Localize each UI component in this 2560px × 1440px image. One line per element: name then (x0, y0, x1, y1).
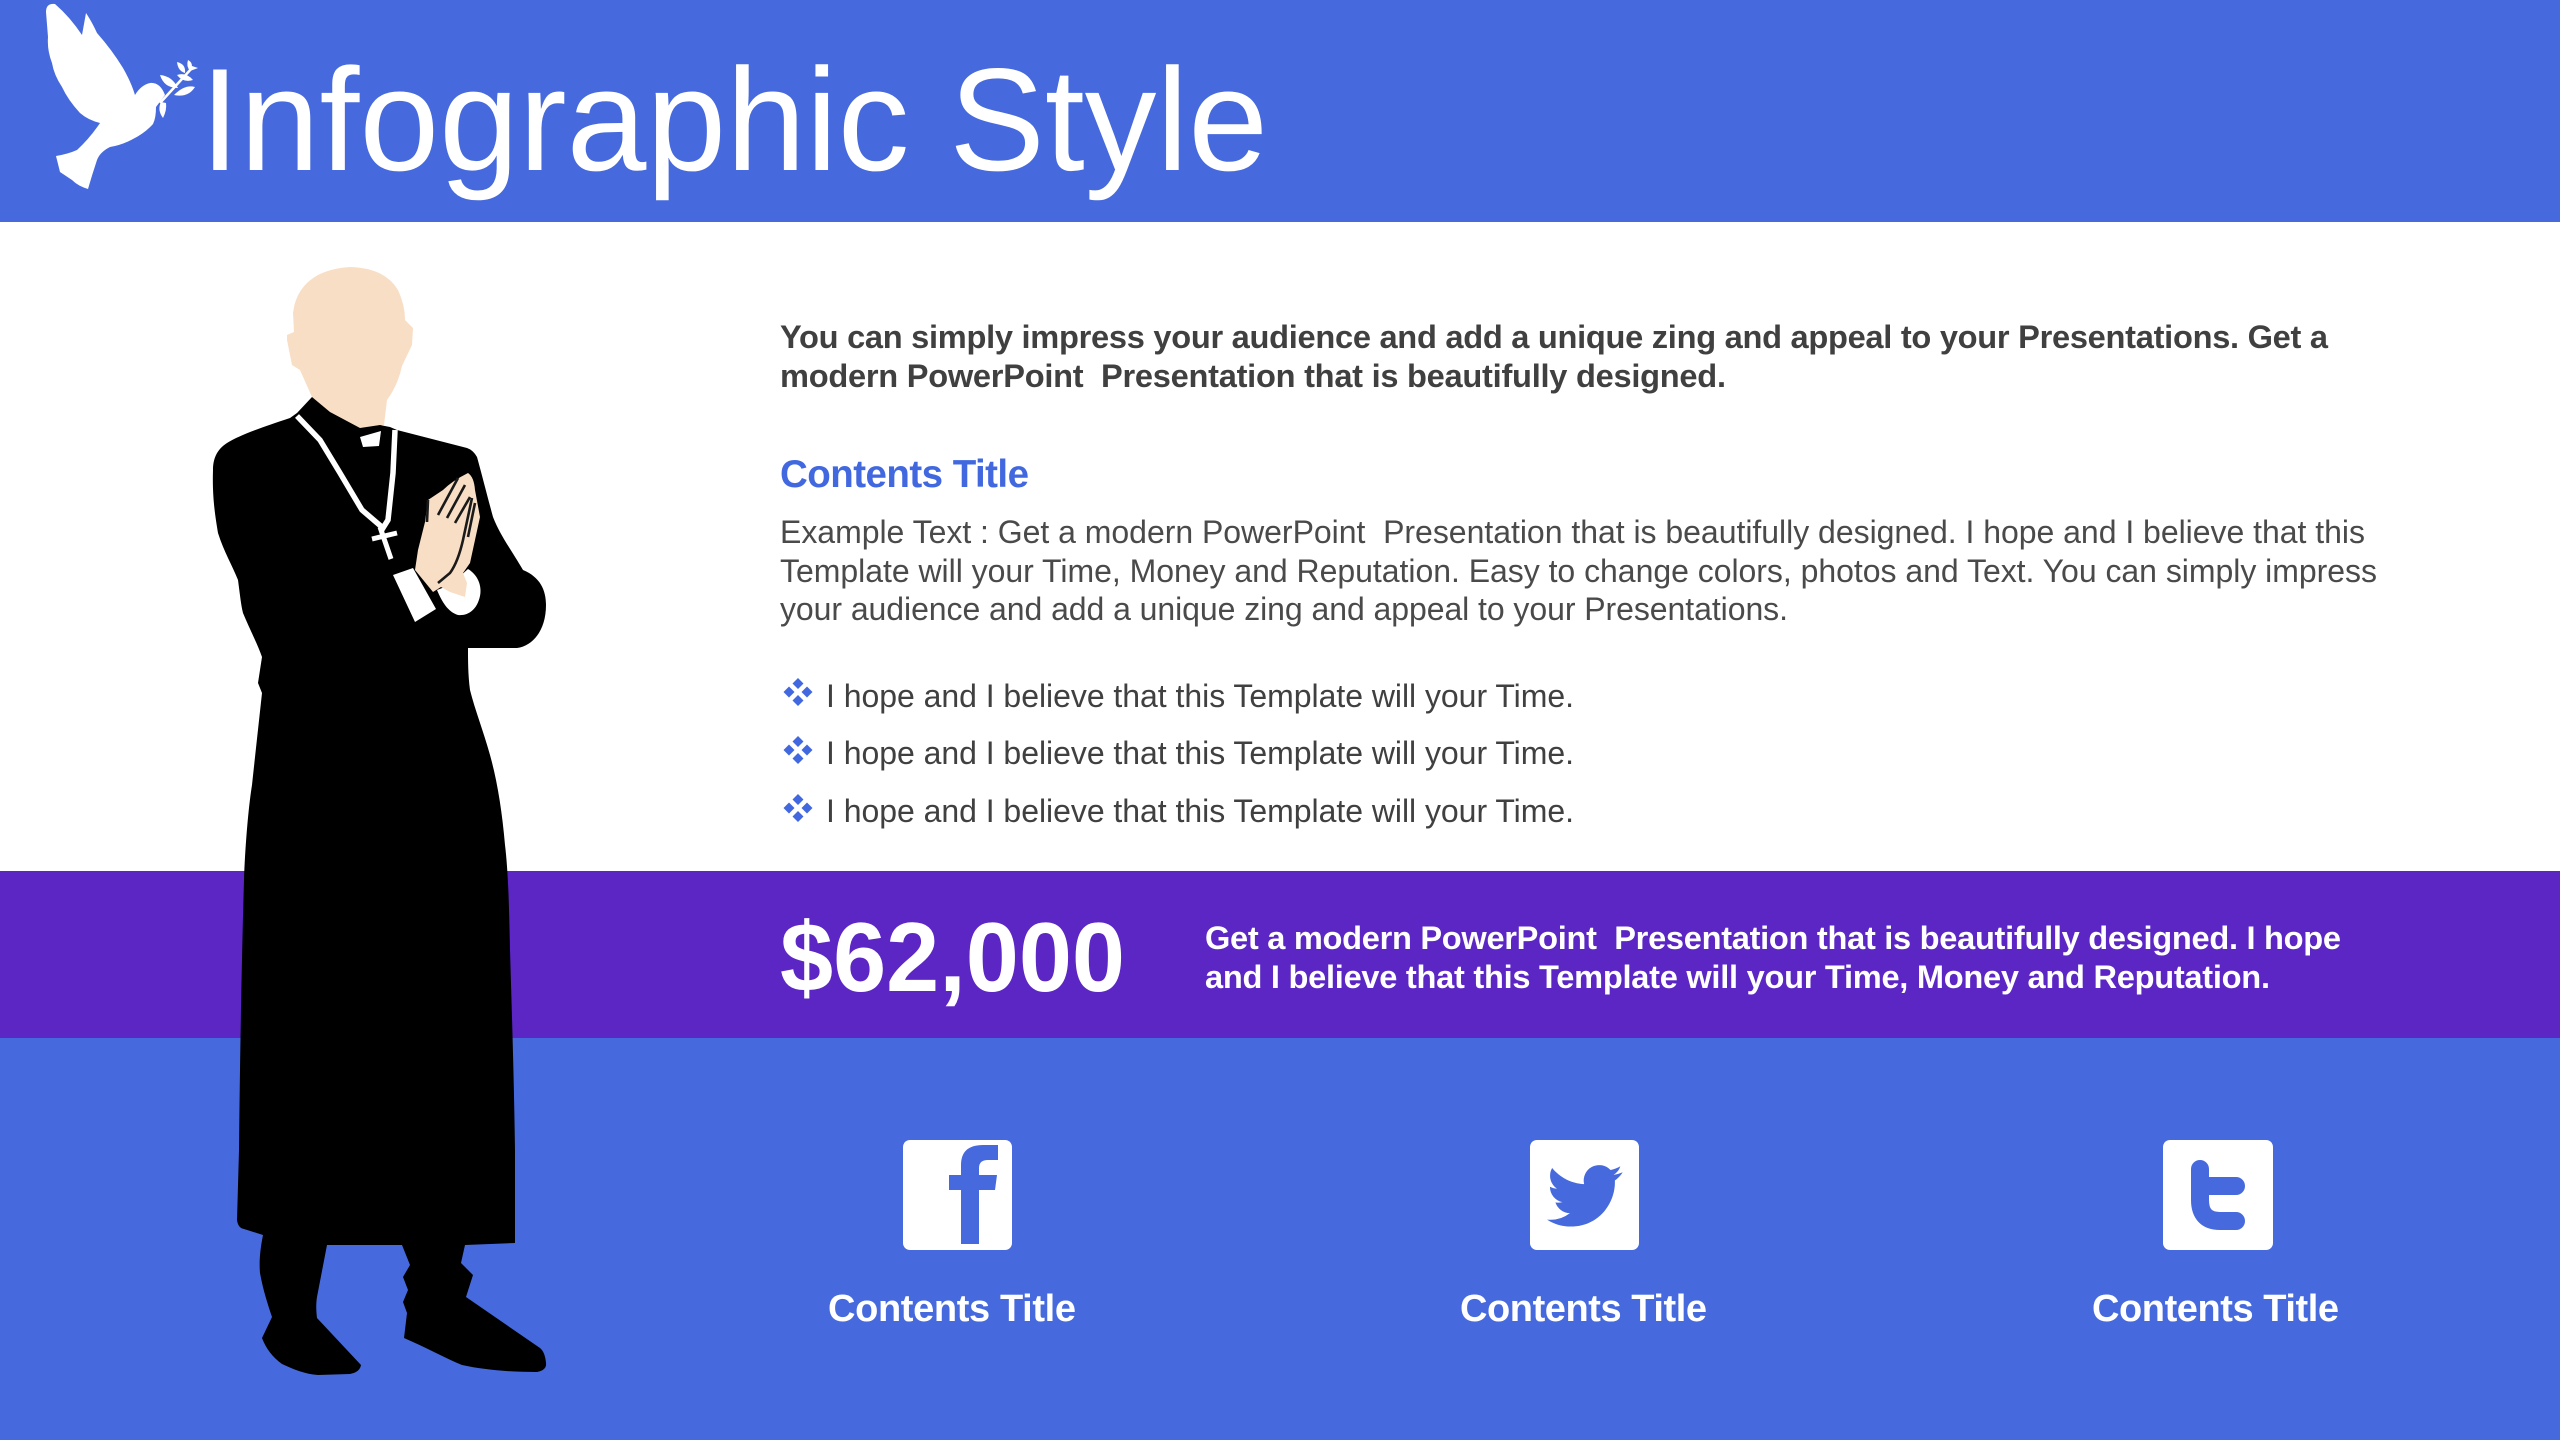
body text: Template will your Time, Money and Reputation. Easy to change colors, photos and Text. You can simply impress (780, 553, 2377, 589)
title: Infographic Style (200, 38, 1268, 201)
bullet 1: I hope and I believe that this Template will your Time. (826, 678, 1574, 714)
rosary chain (297, 416, 395, 528)
finger lines (427, 478, 475, 583)
body text (780, 514, 2377, 627)
panel: header band (0, 0, 2560, 222)
social item: tumblr (2092, 1140, 2339, 1330)
icon: twitter (1530, 1140, 1639, 1250)
panel: bottom blue band (0, 1038, 2560, 1440)
intro paragraph (780, 318, 2329, 394)
label: Contents Title (1460, 1288, 1707, 1330)
social item: twitter (1460, 1140, 1707, 1330)
icon: facebook (903, 1140, 1012, 1250)
label: Contents Title (828, 1288, 1076, 1330)
figure: praying priest silhouette (213, 267, 546, 1375)
label: Contents Title (2092, 1288, 2339, 1330)
bullet 2: I hope and I believe that this Template will your Time. (826, 735, 1574, 771)
white collar (360, 431, 381, 447)
intro paragraph: modern PowerPoint Presentation that is beautifully designed. (780, 357, 1726, 394)
icon: dove with olive branch (46, 4, 198, 189)
bullet list (784, 678, 1574, 829)
cuffs (393, 568, 480, 622)
price figure: $62,000 (780, 902, 1125, 1012)
body text: Example Text : Get a modern PowerPoint Presentation that is beautifully designed. I hope and I believe that this (780, 514, 2365, 550)
head (287, 267, 413, 430)
price description: and I believe that this Template will your Time, Money and Reputation. (1205, 958, 2270, 995)
robe (213, 397, 546, 1375)
icon: tumblr (2163, 1140, 2273, 1250)
body text: your audience and add a unique zing and appeal to your Presentations. (780, 591, 1788, 627)
social item: facebook (828, 1140, 1076, 1330)
panel: purple price band (0, 871, 2560, 1038)
praying hands (415, 473, 480, 597)
intro paragraph: You can simply impress your audience and add a unique zing and appeal to your Presentations. Get a (780, 318, 2329, 355)
section heading: Contents Title (780, 453, 1029, 496)
price description (1205, 919, 2341, 995)
cross (372, 527, 397, 559)
price description: Get a modern PowerPoint Presentation that is beautifully designed. I hope (1205, 919, 2341, 956)
bullet 3: I hope and I believe that this Template will your Time. (826, 793, 1574, 829)
